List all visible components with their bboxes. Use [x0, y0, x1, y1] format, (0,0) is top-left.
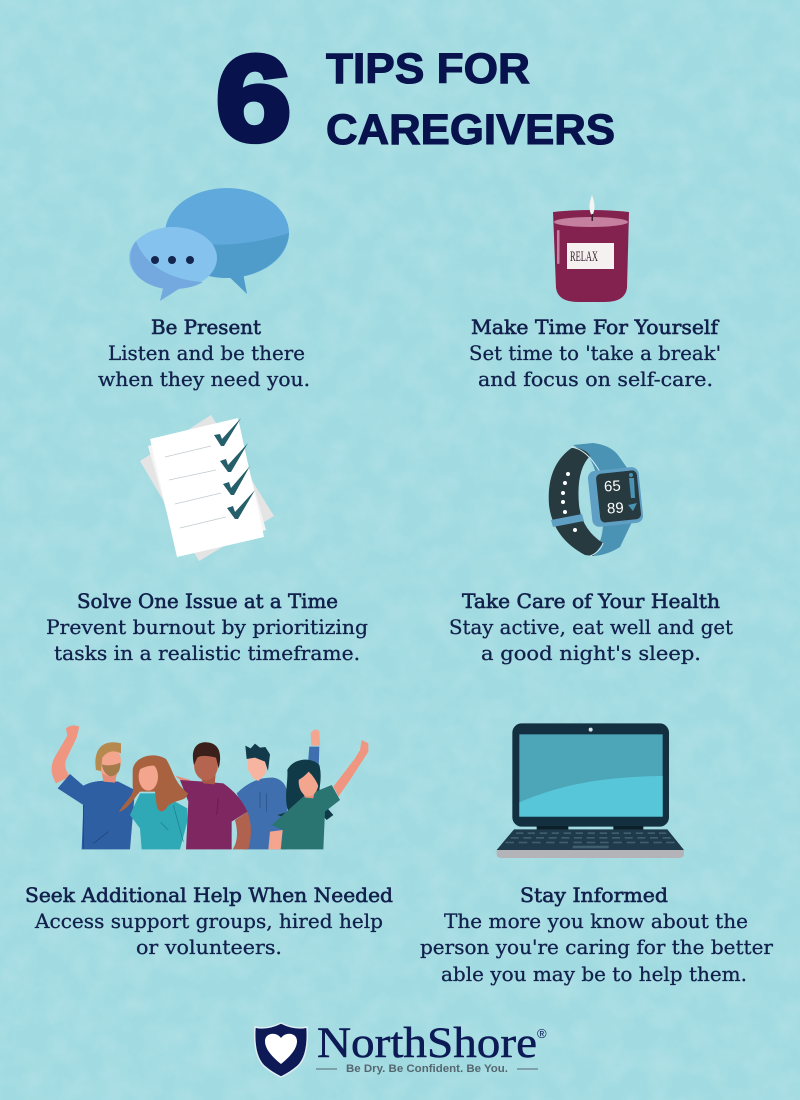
icon: smartwatch: 65: [604, 478, 621, 495]
tip: make time for yourself: and focus on self-care.: [478, 367, 713, 391]
icon: laptop: [497, 723, 684, 858]
tip: solve one issue at a time: tasks in a realistic timeframe.: [54, 641, 360, 665]
tip: stay informed: able you may be to help them.: [441, 962, 747, 986]
tip: make time for yourself: [469, 315, 721, 391]
tip: seek additional help when needed: or volunteers.: [136, 935, 282, 959]
tip: stay informed: Stay Informed: [520, 883, 668, 907]
tip: be present: Be Present: [151, 315, 261, 339]
heading text: TIPS FOR: [326, 45, 530, 93]
tip: seek additional help when needed: Seek Additional Help When Needed: [25, 883, 393, 907]
tip: take care of your health: [449, 589, 733, 665]
icon: shield with heart: [255, 1023, 307, 1077]
tip: solve one issue at a time: Solve One Issue at a Time: [77, 589, 338, 613]
icon: candle: [553, 195, 629, 302]
icon: smartwatch: [549, 443, 644, 556]
person 4: hoodie: [237, 730, 320, 849]
illustration: group of five people: [52, 725, 368, 849]
icon: candle: RELAX: [570, 249, 598, 265]
logo: NorthShore: [255, 1020, 547, 1077]
tagline: Be Dry. Be Confident. Be You.: [346, 1063, 508, 1075]
tip: stay informed: person you're caring for the better: [420, 935, 773, 959]
tip: be present: when they need you.: [98, 367, 310, 391]
tip: seek additional help when needed: Access support groups, hired help: [34, 909, 383, 933]
person 5: green shirt: [268, 740, 368, 849]
tip: stay informed: [420, 883, 773, 986]
registered mark: ®: [537, 1026, 547, 1041]
icon: speech bubbles: [129, 188, 289, 301]
title: [216, 30, 615, 166]
wordmark: NorthShore: [317, 1020, 537, 1067]
tip: seek additional help when needed: [25, 883, 393, 959]
tip: take care of your health: Stay active, eat well and get: [449, 615, 733, 639]
person 1: bearded man: [52, 725, 135, 849]
tip: make time for yourself: Set time to 'take a break': [469, 341, 721, 365]
icon: smartwatch: 89: [607, 500, 624, 517]
tip: solve one issue at a time: Prevent burnout by prioritizing: [46, 615, 368, 639]
icon: checklist: [140, 415, 274, 561]
big numeral 6: 6: [216, 30, 291, 166]
tip: stay informed: The more you know about the: [444, 909, 748, 933]
heading text: [326, 45, 615, 154]
tip: be present: Listen and be there: [108, 341, 305, 365]
tip: be present: [98, 315, 310, 391]
heading text: CAREGIVERS: [326, 106, 615, 154]
tip: take care of your health: Take Care of Your Health: [462, 589, 720, 613]
tip: make time for yourself: Make Time For Yourself: [471, 315, 720, 339]
tip: take care of your health: a good night's sleep.: [481, 641, 701, 665]
person 3: maroon shirt: [175, 742, 251, 849]
person 2: long brown hair: [119, 755, 188, 849]
tip: solve one issue at a time: [46, 589, 368, 665]
